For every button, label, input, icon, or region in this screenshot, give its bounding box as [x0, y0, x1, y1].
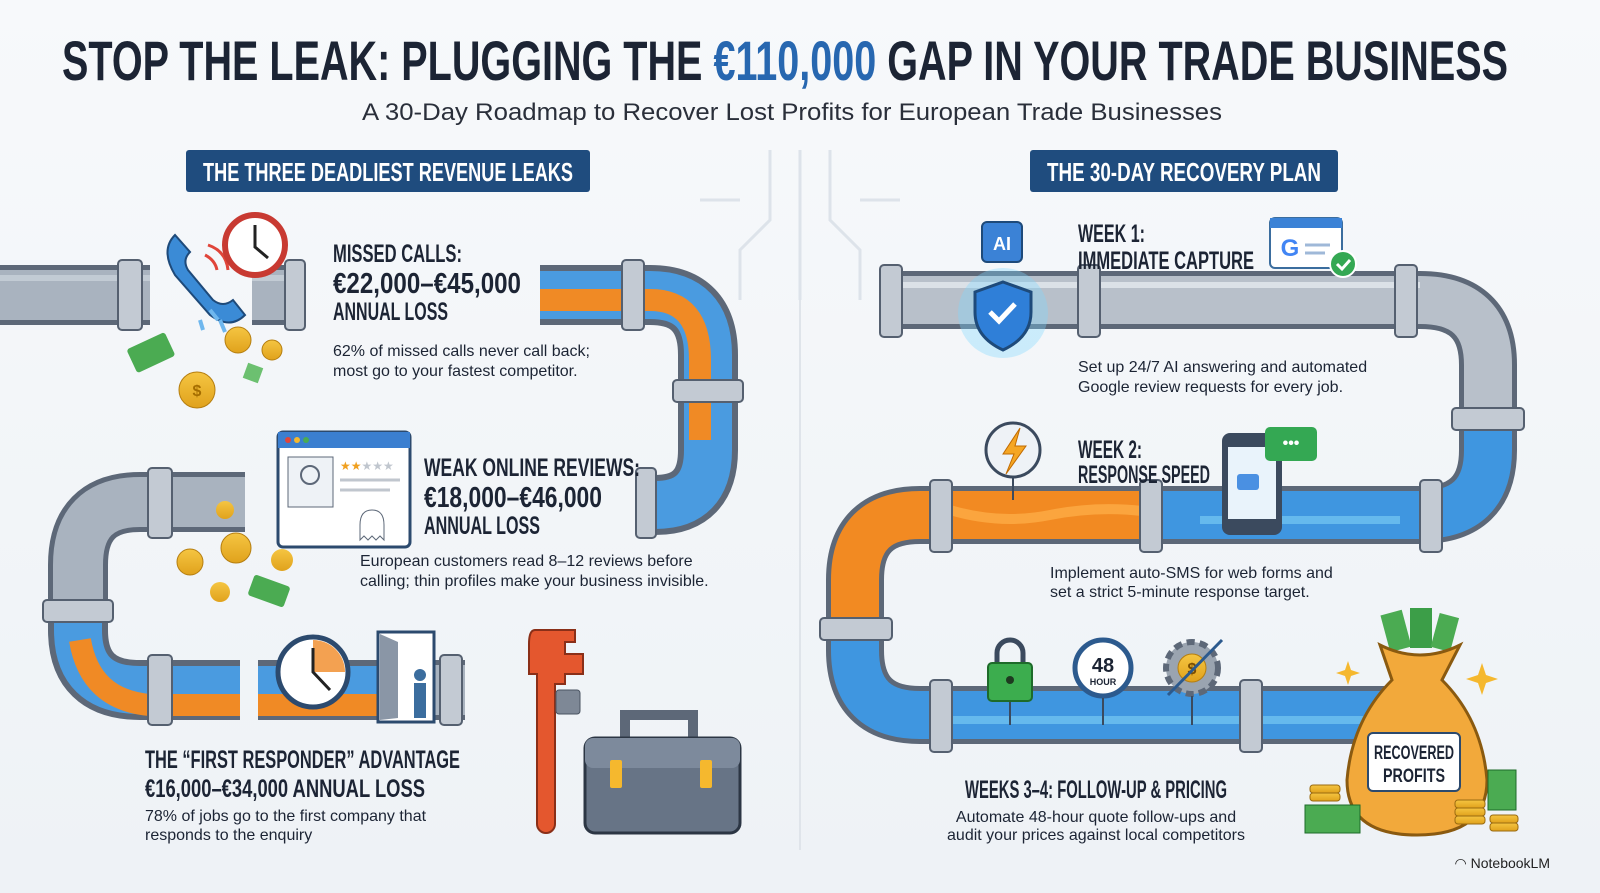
text: week 2: WEEK 2: [1078, 436, 1142, 464]
text: missed calls: most go to your fastest competitor. [333, 363, 578, 380]
header: right [1030, 150, 1338, 192]
icon: AI chip and shield: AI [993, 234, 1011, 254]
text: first responder: responds to the enquiry [145, 827, 312, 844]
icon: money bag recovered profits: PROFITS [1383, 766, 1445, 787]
text: week 2 [1050, 436, 1333, 601]
icon: google review card: G [1281, 235, 1299, 262]
icons: lock, 48 hour, gear: HOUR [1090, 677, 1117, 687]
icon: missed call (phone, clock, money) [126, 215, 285, 408]
icon: phone with chat [1222, 427, 1317, 535]
right pipe system [855, 285, 1488, 720]
text: weeks 3-4 [947, 776, 1245, 844]
icon: phone with chat: ••• [1283, 435, 1300, 452]
text: weak reviews [360, 454, 709, 590]
text: first responder: THE “FIRST RESPONDER” ADVANTAGE [145, 746, 460, 774]
icon: clock and door [278, 632, 434, 722]
text: week 1: Set up 24/7 AI answering and automated [1078, 359, 1367, 376]
text: first responder [145, 746, 460, 844]
header: right: THE 30-DAY RECOVERY PLAN [1047, 157, 1321, 187]
icon: money bag recovered profits [1305, 608, 1518, 835]
text: missed calls: MISSED CALLS: [333, 240, 462, 268]
text: missed calls: €22,000–€45,000 [333, 268, 521, 300]
left pipe system [0, 278, 708, 705]
icon: AI chip and shield [958, 222, 1048, 358]
text: first responder: €16,000–€34,000 ANNUAL LOSS [145, 775, 425, 803]
text: week 2: set a strict 5-minute response target. [1050, 584, 1310, 601]
text: weak reviews: WEAK ONLINE REVIEWS: [424, 454, 640, 482]
icon: review window with ghost and coins [177, 432, 410, 608]
icons: lock, 48 hour, gear [988, 640, 1222, 725]
icon: toolbox [585, 715, 740, 833]
watermark: ◠ NotebookLM [1455, 855, 1550, 871]
icon: missed call (phone, clock, money): $ [193, 383, 202, 400]
text: weeks 3-4: WEEKS 3–4: FOLLOW-UP & PRICING [965, 776, 1227, 804]
text: week 1 [1078, 220, 1367, 396]
text: weak reviews: calling; thin profiles make your business invisible. [360, 573, 709, 590]
text: missed calls [333, 240, 590, 380]
icon: google review card [1270, 218, 1356, 277]
text: first responder: 78% of jobs go to the first company that [145, 808, 427, 825]
icon: lightning [986, 423, 1040, 500]
icon: money bag recovered profits: RECOVERED [1374, 743, 1454, 764]
text: weak reviews: €18,000–€46,000 [424, 482, 602, 514]
icons: lock, 48 hour, gear: 48 [1092, 655, 1114, 677]
header: left [186, 150, 590, 192]
text: week 2: Implement auto-SMS for web forms and [1050, 565, 1333, 582]
text: week 1: WEEK 1: [1078, 220, 1145, 248]
text: week 2: RESPONSE SPEED [1078, 461, 1210, 489]
text: weeks 3-4: audit your prices against local competitors [947, 827, 1245, 844]
text: weeks 3-4: Automate 48-hour quote follow-ups and [956, 809, 1236, 826]
text: weak reviews: ANNUAL LOSS [424, 512, 540, 540]
icon: review window with ghost and coins: ★★★★★ [340, 459, 394, 473]
icons: lock, 48 hour, gear: $ [1188, 661, 1197, 678]
subtitle: A 30-Day Roadmap to Recover Lost Profits for European Trade Businesses [362, 99, 1222, 126]
icon: wrench [529, 630, 583, 833]
text: week 1: Google review requests for every job. [1078, 379, 1343, 396]
header: left: THE THREE DEADLIEST REVENUE LEAKS [203, 157, 573, 187]
text: missed calls: 62% of missed calls never call back; [333, 343, 590, 360]
text: missed calls: ANNUAL LOSS [333, 298, 448, 326]
text: week 1: IMMEDIATE CAPTURE [1078, 247, 1254, 275]
text: weak reviews: European customers read 8–12 reviews before [360, 553, 693, 570]
